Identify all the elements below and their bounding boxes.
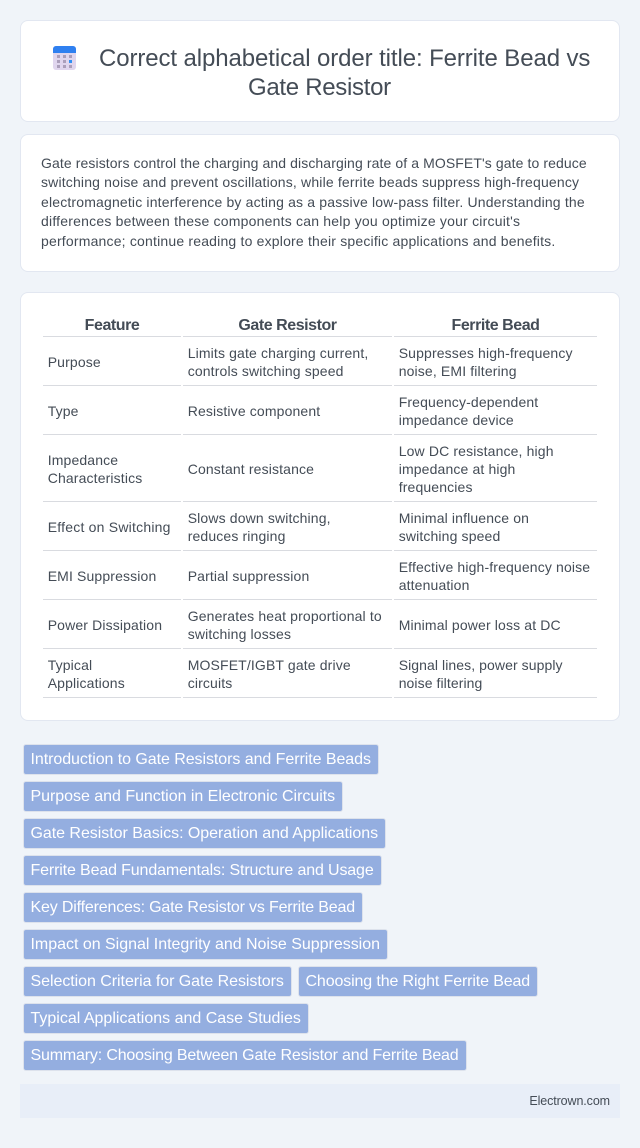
- row: Effect on Switching: Minimal influence on: [399, 510, 529, 526]
- row: Impedance Characteristics: Low DC resistance, high: [399, 443, 554, 459]
- row: Impedance Characteristics: [48, 443, 554, 495]
- table header: Feature: [85, 317, 139, 334]
- row: Impedance Characteristics: Impedance: [48, 452, 118, 468]
- tag: [23, 1040, 467, 1071]
- row: Power Dissipation: Generates heat proportional to: [188, 608, 382, 624]
- tag: Purpose and Function in Electronic Circuits: [30, 788, 335, 805]
- row: Impedance Characteristics: frequencies: [399, 479, 473, 495]
- row: Impedance Characteristics: Characteristics: [48, 470, 142, 486]
- tag: [23, 892, 363, 923]
- panel: introduction: [20, 134, 620, 272]
- table: [43, 317, 597, 698]
- panel: comparison table: [20, 292, 620, 721]
- row: EMI Suppression: Effective high-frequency noise: [399, 559, 590, 575]
- text block: introduction: electromagnetic interference by acting as a passive low-pass filter. Understanding the: [41, 194, 585, 210]
- tag: Choosing the Right Ferrite Bead: [306, 973, 530, 990]
- tag: [23, 855, 382, 886]
- row: Effect on Switching: Effect on Switching: [48, 519, 171, 535]
- row: Effect on Switching: reduces ringing: [188, 528, 286, 544]
- table header: [85, 317, 539, 334]
- text block: introduction: switching noise and prevent oscillations, while ferrite beads suppress high-frequency: [41, 174, 579, 190]
- text block: introduction: performance; continue reading to explore their specific applications and benefits.: [41, 233, 555, 249]
- row: Typical Applications: noise filtering: [399, 675, 482, 691]
- row: Typical Applications: Applications: [48, 675, 125, 691]
- tag: [298, 966, 538, 997]
- row: Effect on Switching: [48, 510, 529, 544]
- row: Type: Type: [48, 403, 79, 419]
- row: Purpose: [48, 345, 573, 379]
- row: Typical Applications: circuits: [188, 675, 232, 691]
- tag: [23, 1003, 309, 1034]
- row: Typical Applications: Typical: [48, 657, 92, 673]
- row: Purpose: noise, EMI filtering: [399, 363, 517, 379]
- tag: Typical Applications and Case Studies: [30, 1010, 301, 1027]
- tag: [23, 929, 388, 960]
- table header: Gate Resistor: [238, 317, 337, 334]
- row: Type: Frequency-dependent: [399, 394, 538, 410]
- row: Purpose: Purpose: [48, 354, 101, 370]
- row: Purpose: Suppresses high-frequency: [399, 345, 573, 361]
- tag: Ferrite Bead Fundamentals: Structure and Usage: [30, 862, 374, 879]
- title: Correct alphabetical order title: Ferrite Bead vs: [99, 45, 590, 72]
- row: Effect on Switching: switching speed: [399, 528, 500, 544]
- row: Effect on Switching: Slows down switching,: [188, 510, 331, 526]
- text block: introduction: differences between these components can help you optimize your circuit's: [41, 213, 520, 229]
- row: EMI Suppression: EMI Suppression: [48, 568, 156, 584]
- table header: Ferrite Bead: [452, 317, 539, 334]
- row: Power Dissipation: Minimal power loss at DC: [399, 617, 561, 633]
- footer credit: Electrown.com: [529, 1094, 610, 1108]
- tag list: contents: [23, 744, 538, 1071]
- tag: Impact on Signal Integrity and Noise Suppression: [30, 936, 380, 953]
- row: Power Dissipation: [48, 608, 561, 642]
- icon: calendar: [53, 46, 76, 70]
- row: Typical Applications: [48, 657, 563, 691]
- row: Power Dissipation: switching losses: [188, 626, 291, 642]
- tag: Gate Resistor Basics: Operation and Applications: [30, 825, 378, 842]
- tag: Key Differences: Gate Resistor vs Ferrite Bead: [30, 899, 355, 916]
- row: EMI Suppression: attenuation: [399, 577, 470, 593]
- tag: [23, 818, 386, 849]
- row: Impedance Characteristics: Constant resistance: [188, 461, 314, 477]
- text block: introduction: [41, 155, 587, 249]
- row: Impedance Characteristics: impedance at high: [399, 461, 515, 477]
- text block: introduction: Gate resistors control the charging and discharging rate of a MOSFET's gate to reduce: [41, 155, 587, 171]
- row: Type: Resistive component: [188, 403, 320, 419]
- row: EMI Suppression: [48, 559, 590, 593]
- tag: [23, 744, 379, 775]
- tag: Introduction to Gate Resistors and Ferrite Beads: [30, 751, 371, 768]
- tag: [23, 966, 292, 997]
- row: Typical Applications: MOSFET/IGBT gate drive: [188, 657, 351, 673]
- row: Purpose: Limits gate charging current,: [188, 345, 368, 361]
- row: Type: impedance device: [399, 412, 514, 428]
- row: EMI Suppression: Partial suppression: [188, 568, 309, 584]
- tag: Selection Criteria for Gate Resistors: [30, 973, 284, 990]
- row: Typical Applications: Signal lines, power supply: [399, 657, 563, 673]
- row: Power Dissipation: Power Dissipation: [48, 617, 162, 633]
- tag: Summary: Choosing Between Gate Resistor and Ferrite Bead: [30, 1047, 459, 1064]
- title: [99, 45, 590, 101]
- title: Gate Resistor: [248, 74, 391, 101]
- panel: title card: [20, 20, 620, 122]
- row: Type: [48, 394, 538, 428]
- footer: [20, 1084, 620, 1118]
- tag: [23, 781, 343, 812]
- row: Purpose: controls switching speed: [188, 363, 344, 379]
